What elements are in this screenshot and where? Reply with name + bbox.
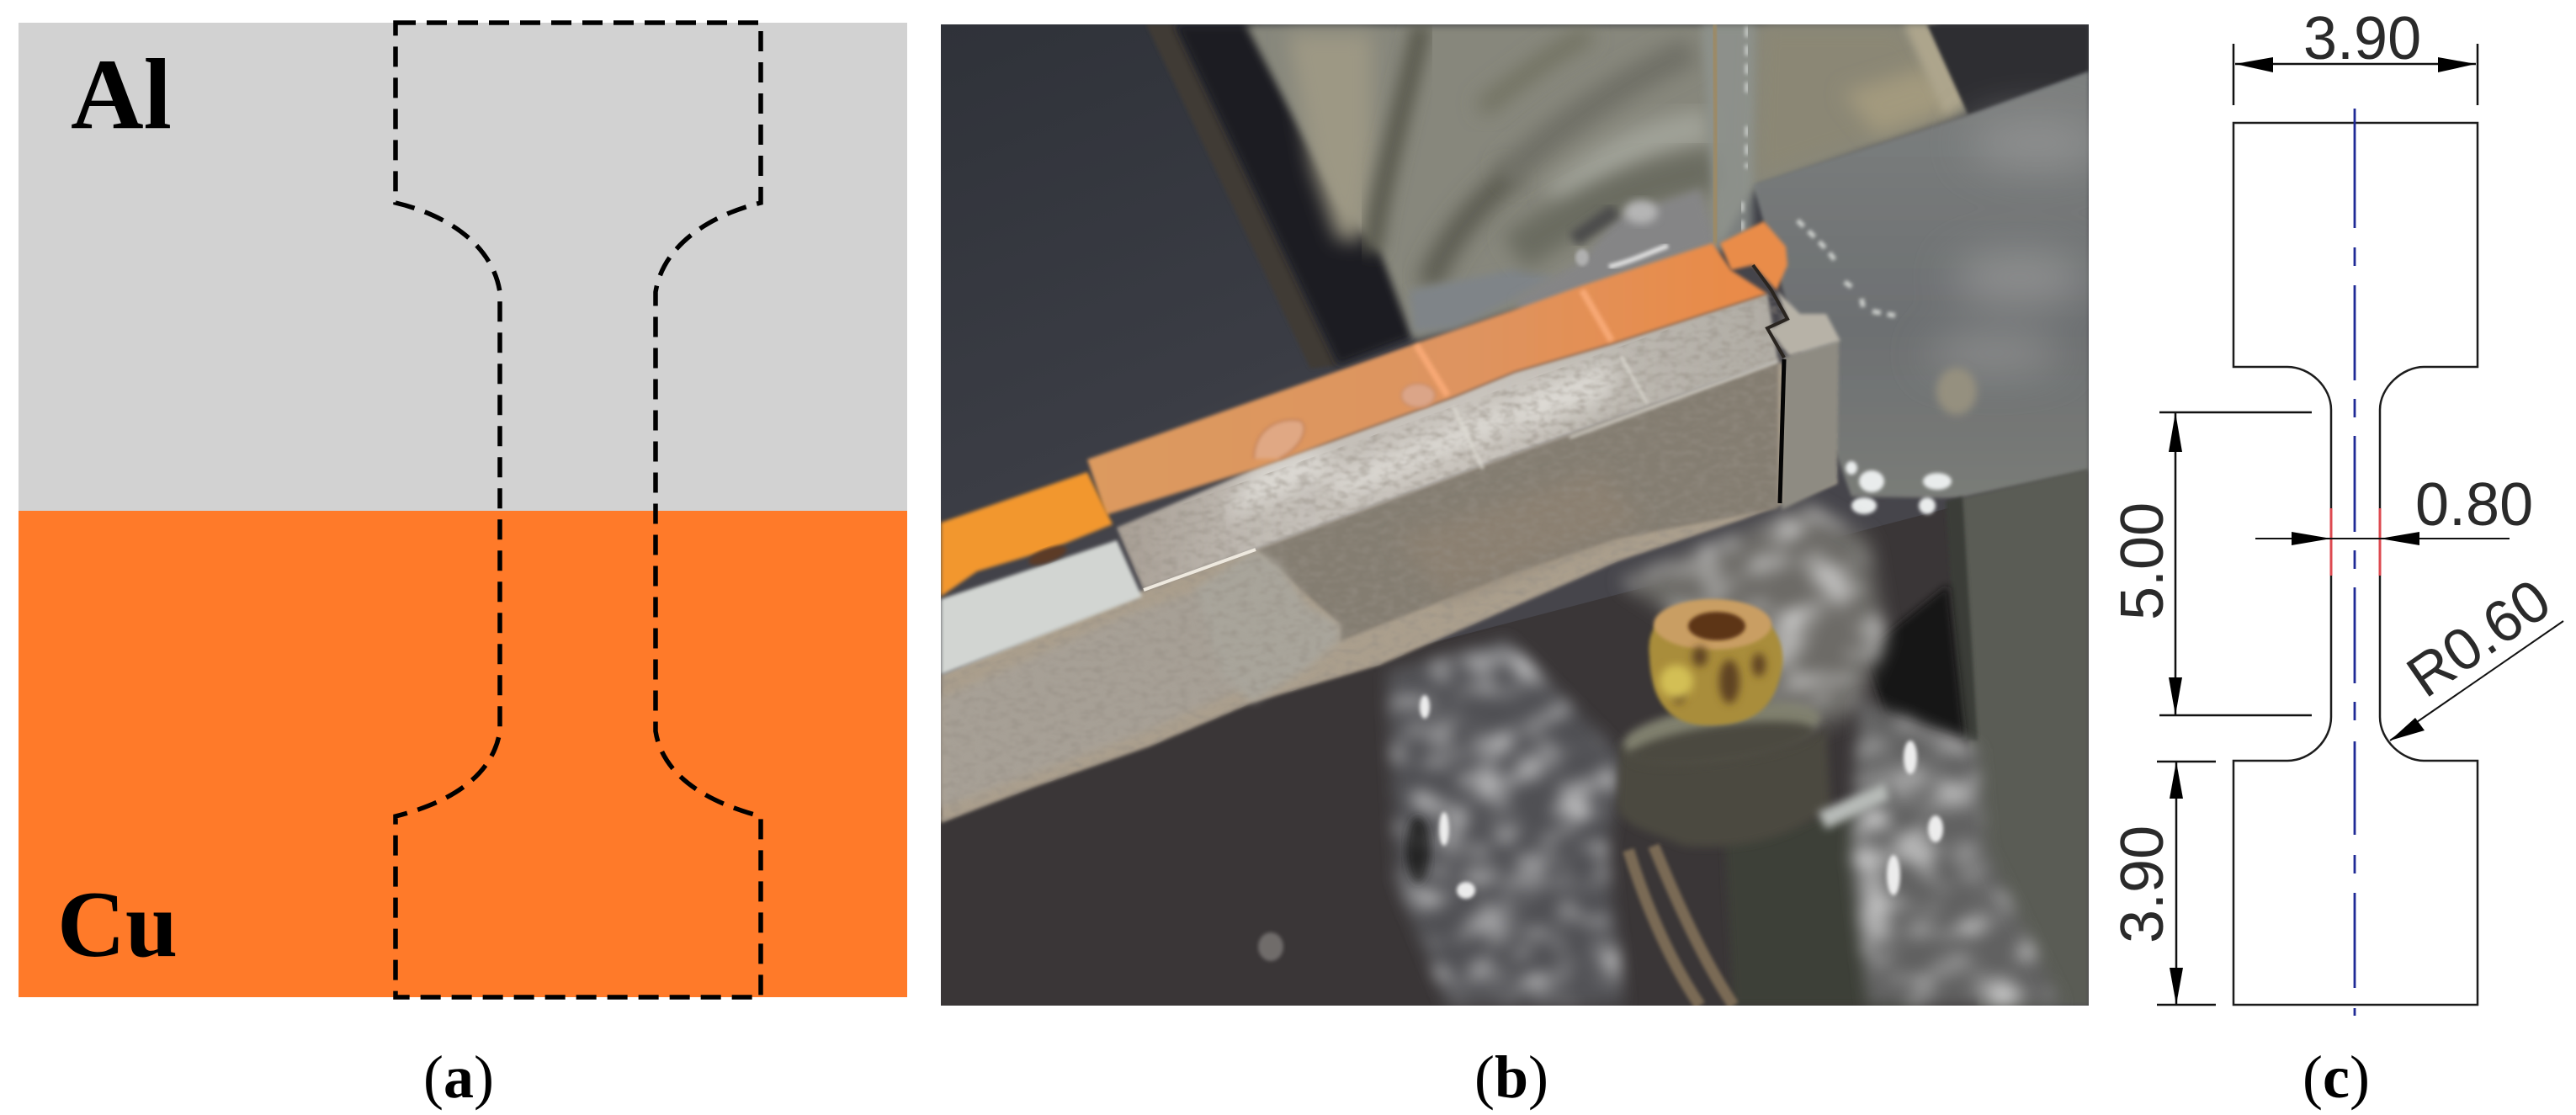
blurred tan spot — [1936, 368, 1977, 415]
dark background lower — [941, 505, 1986, 1006]
neck width dimension 0.80: 0.80 — [2415, 471, 2533, 539]
copper tab at tip — [1720, 221, 1787, 290]
water stream over the nut — [1620, 505, 1885, 741]
water speckle on the streams — [1380, 505, 2070, 1010]
copper region — [19, 511, 907, 997]
gauge marks — [2331, 508, 2380, 576]
aluminium region — [19, 23, 907, 511]
water splash behind tip — [1515, 189, 1717, 316]
dark background upper right — [1927, 24, 2089, 115]
aluminium tab at tip — [1769, 290, 1840, 356]
aluminium top highlights — [1220, 362, 1616, 522]
grip dimension 3.90 — [2109, 762, 2216, 1005]
centre line — [2354, 109, 2356, 1016]
bar light variation — [941, 572, 1313, 808]
vice edge shadow — [1946, 496, 1978, 741]
neck width dimension 0.80 — [2255, 471, 2533, 545]
rough face brown tint — [1397, 471, 1641, 597]
blurred spring folds — [1246, 24, 1973, 341]
copper strip left of seam — [941, 472, 1113, 597]
aluminium seams — [1453, 356, 1778, 469]
grey vice block — [1753, 72, 2089, 498]
white glints in streams — [1420, 695, 1943, 899]
block highlights — [1927, 118, 2104, 370]
wire-cut slot — [1753, 265, 1787, 358]
dark corrosion spots — [1027, 542, 1069, 569]
water jet — [1702, 24, 1755, 252]
caption b: (b) — [1474, 1043, 1548, 1111]
copper dimple large — [1254, 420, 1304, 459]
machine rod — [1146, 24, 1338, 369]
wire electrode — [1713, 24, 1717, 244]
copper wires — [1628, 846, 1734, 1006]
label Cu: Cu — [57, 873, 178, 977]
smooth grey patch — [1195, 550, 1340, 703]
panel b: photograph of specimen on wire-cutting machine — [941, 24, 2104, 1010]
copper seams — [1416, 290, 1612, 396]
copper dimple small — [1401, 384, 1435, 407]
aluminium edge highlight — [1144, 550, 1256, 590]
black gap beside nut — [1864, 585, 1965, 741]
wire-cut slot lower — [1780, 359, 1784, 503]
right end face of specimen — [1782, 341, 1839, 510]
sparkle trail on block — [1798, 220, 1895, 316]
rough cut side face — [1256, 361, 1778, 641]
label Al: Al — [71, 38, 172, 150]
panel c: specimen dimension drawing — [2109, 5, 2563, 1016]
dashed tensile specimen outline — [396, 23, 761, 997]
vice front face — [1960, 469, 2089, 1006]
panel a: Al-Cu weld layout — [19, 23, 907, 997]
left water stream — [1387, 640, 1624, 1006]
white droplets — [1846, 461, 1952, 514]
width dimension 3.90: 3.90 — [2303, 5, 2421, 72]
specimen outline — [2233, 123, 2478, 1005]
copper top strip main — [1087, 243, 1767, 515]
caption a: (a) — [423, 1043, 494, 1111]
left white aluminium piece — [941, 540, 1142, 675]
right water stream — [1851, 698, 2062, 1006]
blurred dot bottom left — [1258, 932, 1283, 961]
aluminium top face — [1117, 294, 1778, 590]
length dimension 5.00: 5.00 — [2109, 502, 2176, 620]
black gap behind rod — [1175, 24, 1414, 365]
dark background upper left — [941, 24, 2089, 1006]
brass nut — [1649, 599, 1782, 725]
water droplets on jet — [1742, 27, 1747, 244]
caption c: (c) — [2302, 1043, 2370, 1111]
rough texture across aluminium — [941, 286, 1850, 833]
lower aluminium bar body — [941, 362, 1837, 823]
grip dimension 3.90: 3.90 — [2109, 826, 2176, 943]
width dimension 3.90 — [2233, 5, 2478, 105]
length dimension 5.00 — [2109, 412, 2312, 715]
lower collar — [1617, 692, 1889, 847]
radius dimension R0.60: R0.60 — [2395, 566, 2562, 709]
dark lower machine body — [1729, 823, 1860, 1003]
